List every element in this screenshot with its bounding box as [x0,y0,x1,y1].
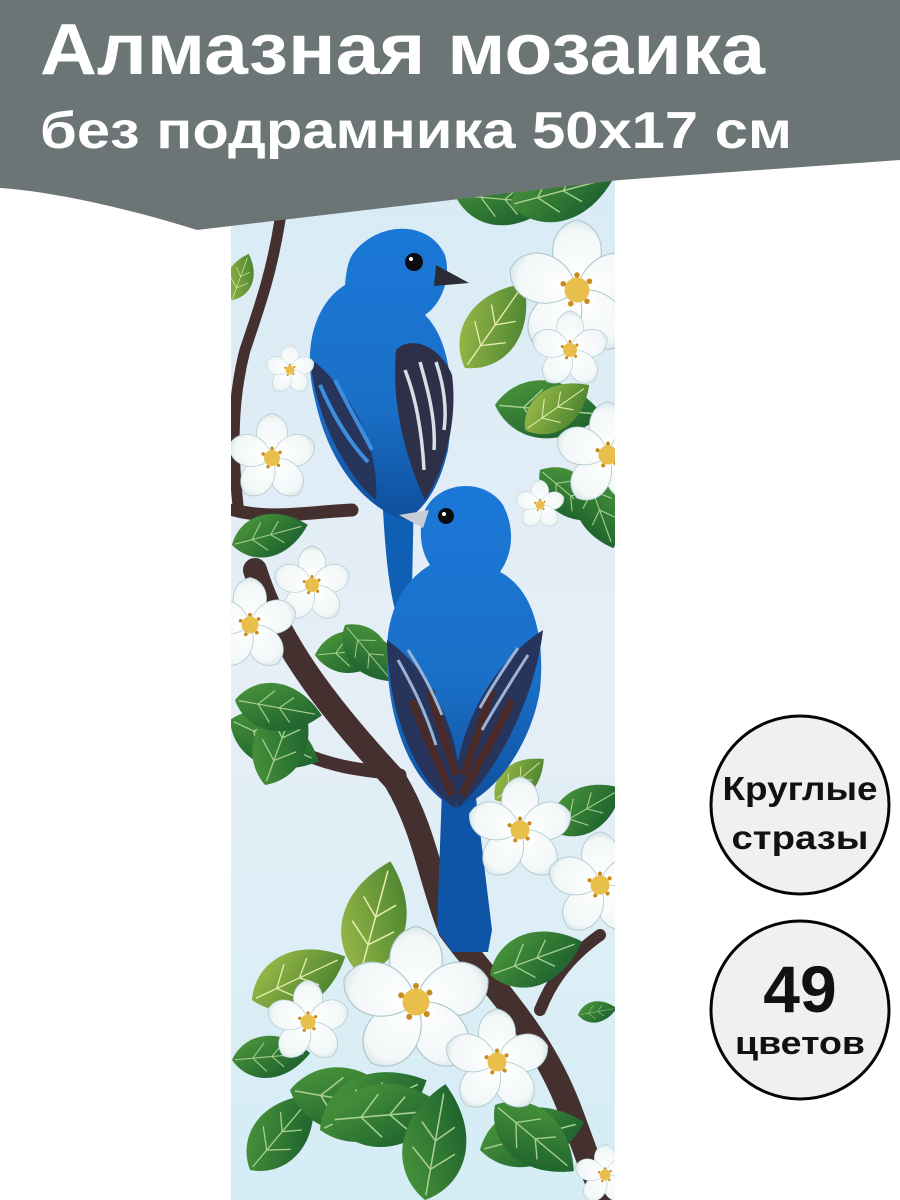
badge: 49 colours [711,921,889,1099]
badge: 49 colours: 49 [763,952,837,1026]
artwork: two blue birds on a flowering branch [231,180,615,1200]
lower bird [387,486,543,952]
subtitle: без подрамника 50х17 см [40,102,792,160]
badge: round rhinestones: Круглые [722,770,878,807]
leaves [231,180,615,1200]
badge: 49 colours: цветов [735,1025,865,1061]
branches [234,220,605,1200]
upper bird [310,229,469,620]
title: Алмазная мозаика [40,10,766,90]
blossoms [231,220,615,1200]
banner [0,0,900,230]
badge: round rhinestones: стразы [732,819,868,856]
badge: round rhinestones [711,716,889,894]
